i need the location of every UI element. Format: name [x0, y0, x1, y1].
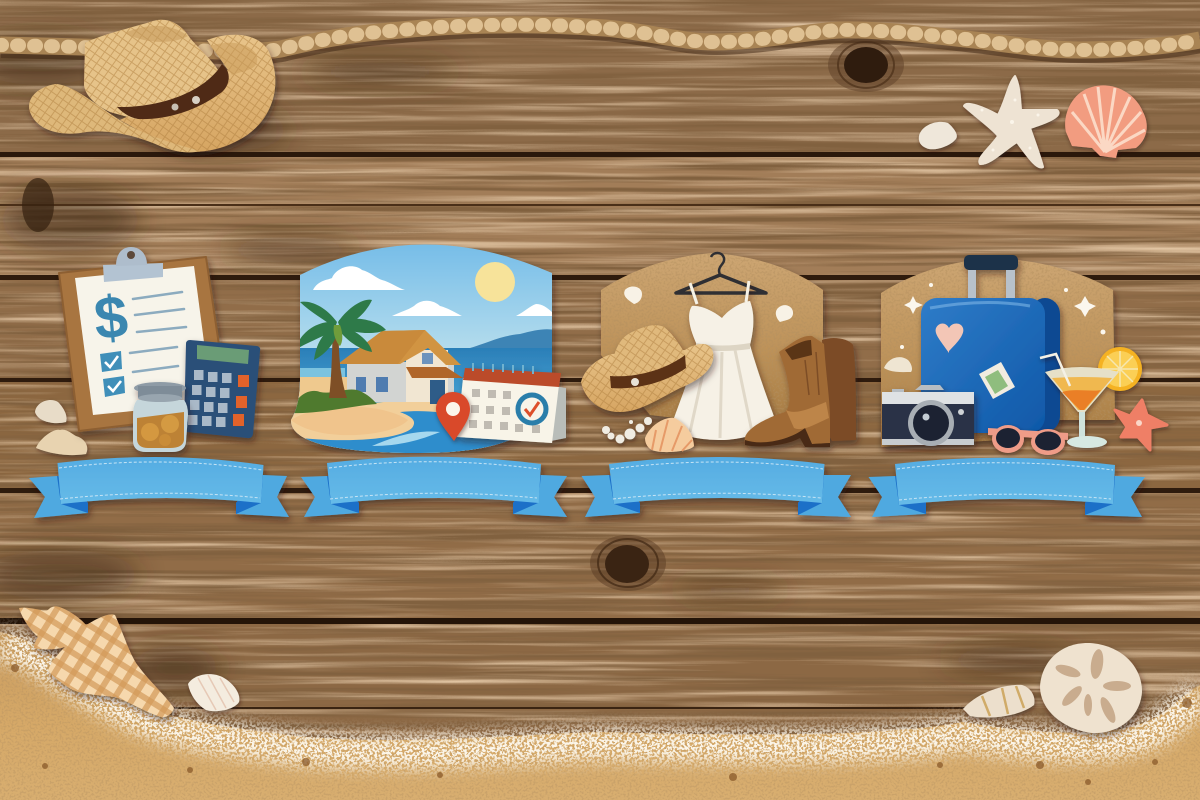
icon: peach scallop shell	[645, 418, 694, 452]
hat band	[117, 64, 229, 119]
icon: clothes hanger	[676, 253, 766, 293]
sea	[285, 348, 560, 408]
icon: white sundress	[670, 281, 777, 440]
icon: blue suitcase	[921, 255, 1060, 433]
icon: coral sunglasses	[988, 425, 1068, 455]
icon: calculator	[184, 340, 260, 438]
house	[347, 362, 454, 402]
sand shoreline	[0, 600, 1200, 800]
icon: hearts	[624, 287, 793, 322]
icon: striped spiral shell bottom right	[963, 685, 1034, 718]
palm tree	[329, 338, 347, 398]
column 2: beach house and calendar illustration	[285, 240, 567, 517]
icon: left side shells	[35, 400, 87, 455]
icon: small beach shell	[884, 357, 912, 372]
icon: cowboy boots	[745, 336, 856, 447]
cork backing panel	[875, 255, 1120, 450]
icon: conch shell bottom left	[19, 606, 174, 717]
back brim	[120, 35, 275, 152]
icon: cocktail glass with lemon slice	[1040, 347, 1142, 448]
icon: small white shell bottom left	[188, 674, 239, 711]
checklist lines	[130, 292, 186, 372]
column 1: budget illustration	[29, 247, 289, 518]
icon: camera	[882, 385, 974, 446]
sand	[291, 402, 509, 456]
checkboxes	[100, 351, 122, 372]
icon: pearl necklace	[602, 417, 652, 444]
clouds	[313, 266, 405, 290]
icon: straw hat with brown band	[581, 325, 713, 412]
blue ribbon banner 1	[29, 457, 289, 518]
cork backing panel	[595, 250, 830, 435]
bush	[293, 389, 377, 413]
icon: straw cowboy hat top left	[29, 20, 275, 152]
icon: clipboard	[59, 247, 229, 431]
icon: sand dollar	[1040, 643, 1142, 733]
rope	[0, 25, 1200, 55]
icon: calendar	[457, 363, 566, 443]
sun	[475, 262, 515, 302]
icon: top right shells and starfish	[919, 76, 1147, 168]
photo sticker	[979, 362, 1015, 399]
beach scene	[285, 240, 560, 460]
dollar sign: $	[91, 283, 131, 352]
water	[304, 411, 510, 456]
blue ribbon banner 3	[582, 457, 851, 517]
scallop shell	[1065, 85, 1147, 158]
blue ribbon banner 4	[868, 458, 1145, 517]
heart sticker	[936, 324, 963, 353]
column 3: outfit illustration	[581, 250, 856, 517]
front brim	[29, 84, 200, 152]
wood knots	[22, 38, 904, 591]
small white shell	[919, 122, 957, 149]
icon: map pin	[436, 392, 470, 441]
icon: coin jar	[133, 382, 188, 452]
crown	[84, 20, 228, 119]
starfish	[964, 76, 1059, 168]
icon: coral starfish	[1115, 400, 1167, 450]
icon: sparkles	[900, 283, 1106, 349]
mountains	[470, 329, 552, 348]
blue ribbon banner 2	[301, 457, 567, 517]
column 4: packing illustration	[868, 255, 1167, 517]
